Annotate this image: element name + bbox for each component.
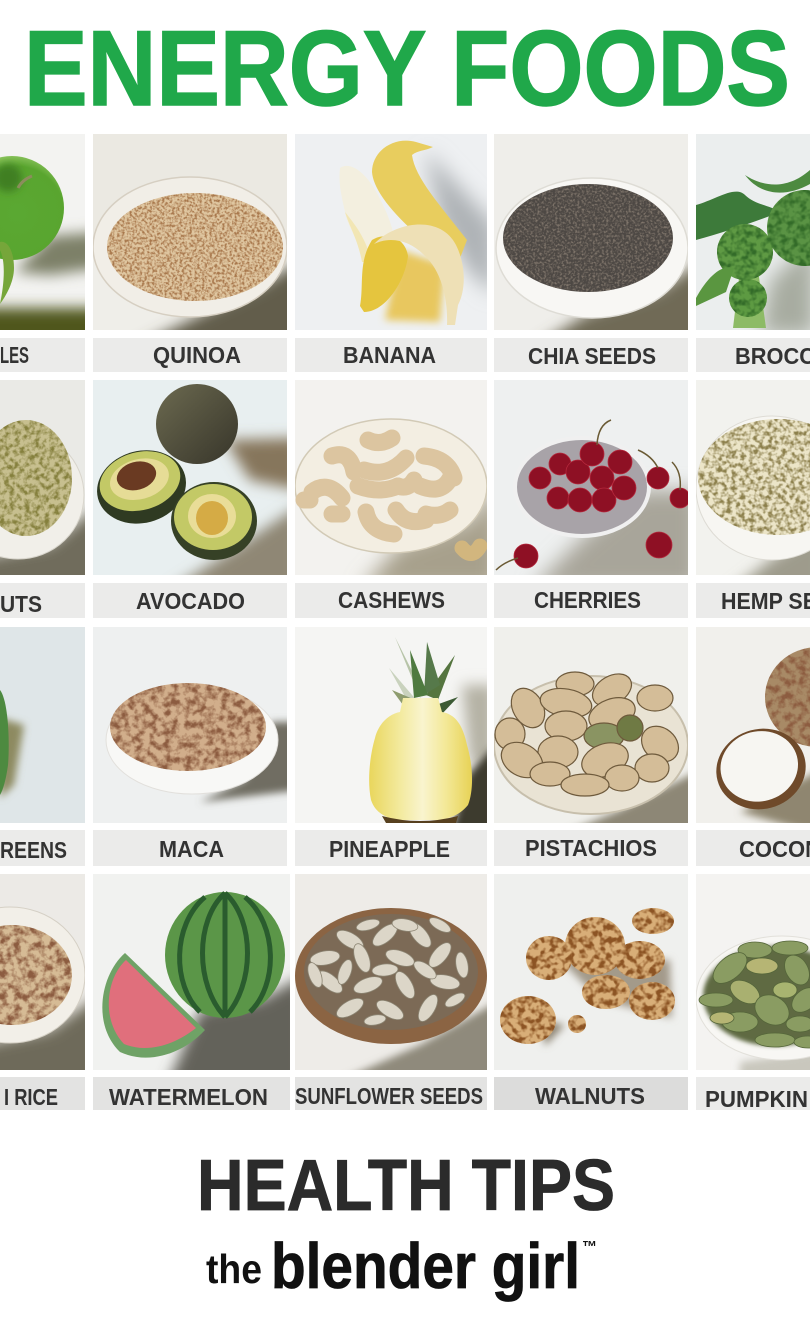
label: chia seeds: CHIA SEEDS: [528, 343, 656, 369]
label: pistachios: [494, 830, 688, 866]
label: watermelon: WATERMELON: [109, 1084, 268, 1110]
label: pumpkin seeds: PUMPKIN: [705, 1086, 808, 1112]
panel: banana: [295, 134, 495, 330]
cashews: [304, 438, 454, 534]
label: avocado: [93, 583, 287, 618]
bowl: [295, 908, 487, 1044]
label: greens: [0, 830, 85, 866]
icon: banana peel: [360, 236, 408, 312]
logo: the blender girl: the: [206, 1246, 262, 1292]
panel: sunflower seeds: [295, 874, 500, 1085]
cherry stems: [496, 420, 680, 570]
bowl: [696, 416, 810, 560]
label: sunflower seeds: [295, 1077, 487, 1110]
icon: watermelon wedge: [102, 953, 205, 1058]
panel: coconut: [696, 627, 810, 835]
panel: pistachios: [494, 627, 700, 835]
panel: watermelon: [93, 874, 305, 1090]
label: cashews: [295, 583, 487, 618]
panel: brown rice: [0, 874, 100, 1095]
label: cherries: [494, 583, 688, 618]
panel: cashews: [295, 380, 487, 575]
icon: avocado half with hollow: [171, 482, 257, 560]
label: apples: [0, 338, 85, 372]
bowl: [515, 438, 649, 536]
icon: whole avocado: [156, 384, 238, 464]
label: banana: BANANA: [343, 342, 436, 368]
label: pineapple: [295, 830, 487, 866]
label: quinoa: QUINOA: [153, 342, 241, 368]
pumpkin seeds: [699, 941, 810, 1048]
panel: hemp seeds: [696, 380, 810, 595]
panel: maca: [93, 627, 300, 823]
bowl: [0, 452, 84, 560]
label: quinoa: [93, 338, 287, 372]
icon: second apple: [0, 242, 14, 304]
label: hemp seeds: [696, 583, 810, 618]
maca powder: [110, 683, 266, 771]
icon: whole watermelon: [165, 892, 285, 1018]
label: pineapple: PINEAPPLE: [329, 836, 450, 862]
cherries: [514, 442, 690, 568]
label: sprouts: [0, 583, 85, 618]
icon: avocado half with pit: [97, 450, 186, 524]
label: sunflower seeds: SUNFLOWER SEEDS: [295, 1083, 483, 1109]
panel: greens: [0, 627, 85, 823]
label: pistachios: PISTACHIOS: [525, 835, 657, 861]
icon: peeled banana: [339, 166, 394, 250]
panel: cherries: [494, 380, 688, 575]
label: sprouts: UTS: [0, 591, 42, 617]
label: brown rice: I RICE: [4, 1084, 58, 1110]
panel: quinoa: [93, 134, 287, 330]
logo: the blender girl: blender girl: [271, 1230, 580, 1302]
label: broccoli: [696, 338, 810, 372]
bowl: [494, 676, 688, 814]
loose cashew: [462, 546, 480, 554]
label: cherries: CHERRIES: [534, 587, 641, 613]
pistachios: [495, 667, 686, 796]
icon: whole coconut: [765, 647, 810, 747]
panel: apples: [0, 134, 85, 330]
panel: broccoli: [696, 134, 810, 335]
walnuts: [500, 908, 675, 1044]
bowl: [696, 936, 810, 1060]
panel: pineapple: [295, 627, 495, 835]
panel: sprouts: [0, 380, 85, 575]
panel: pumpkin seeds: [696, 874, 810, 1080]
label: brown rice: [0, 1077, 85, 1110]
sunflower seeds: [305, 915, 470, 1027]
chia seeds: [503, 184, 673, 292]
logo: the blender girl: ™: [582, 1239, 597, 1256]
label: watermelon: [93, 1077, 290, 1110]
panel: avocado: [93, 380, 287, 575]
label: walnuts: WALNUTS: [535, 1083, 645, 1109]
icon: pineapple leaves: [389, 637, 458, 716]
label: greens: REENS: [0, 837, 67, 863]
rice: [0, 925, 72, 1025]
label: maca: MACA: [159, 836, 224, 862]
icon: coconut half: [707, 719, 810, 819]
heading: health tips: HEALTH TIPS: [197, 1146, 615, 1226]
hemp seeds: [698, 419, 810, 535]
label: apples: LES: [0, 342, 29, 368]
icon: green apple: [0, 156, 64, 260]
icon: banana back: [372, 141, 467, 266]
bowl: [106, 686, 278, 794]
icon: broccoli leaves: [696, 192, 780, 240]
bowl: [93, 177, 287, 317]
panel: walnuts: [494, 874, 688, 1070]
label: coconut: [696, 830, 810, 866]
bowl: [295, 419, 487, 553]
icon: broccoli florets: [696, 190, 810, 328]
label: banana: [295, 338, 487, 372]
label: chia seeds: [494, 338, 688, 372]
label: pumpkin seeds: [696, 1077, 810, 1112]
bowl: [0, 907, 85, 1043]
label: cashews: CASHEWS: [338, 587, 445, 613]
label: maca: [93, 830, 287, 866]
quinoa grains: [107, 193, 283, 301]
panel: chia seeds: [494, 134, 688, 330]
bowl: [496, 178, 688, 318]
label: walnuts: [494, 1077, 688, 1110]
icon: pineapple flesh: [369, 698, 472, 820]
icon: sprouts: [0, 420, 72, 536]
label: avocado: AVOCADO: [136, 588, 245, 614]
icon: green leaf: [0, 690, 9, 795]
